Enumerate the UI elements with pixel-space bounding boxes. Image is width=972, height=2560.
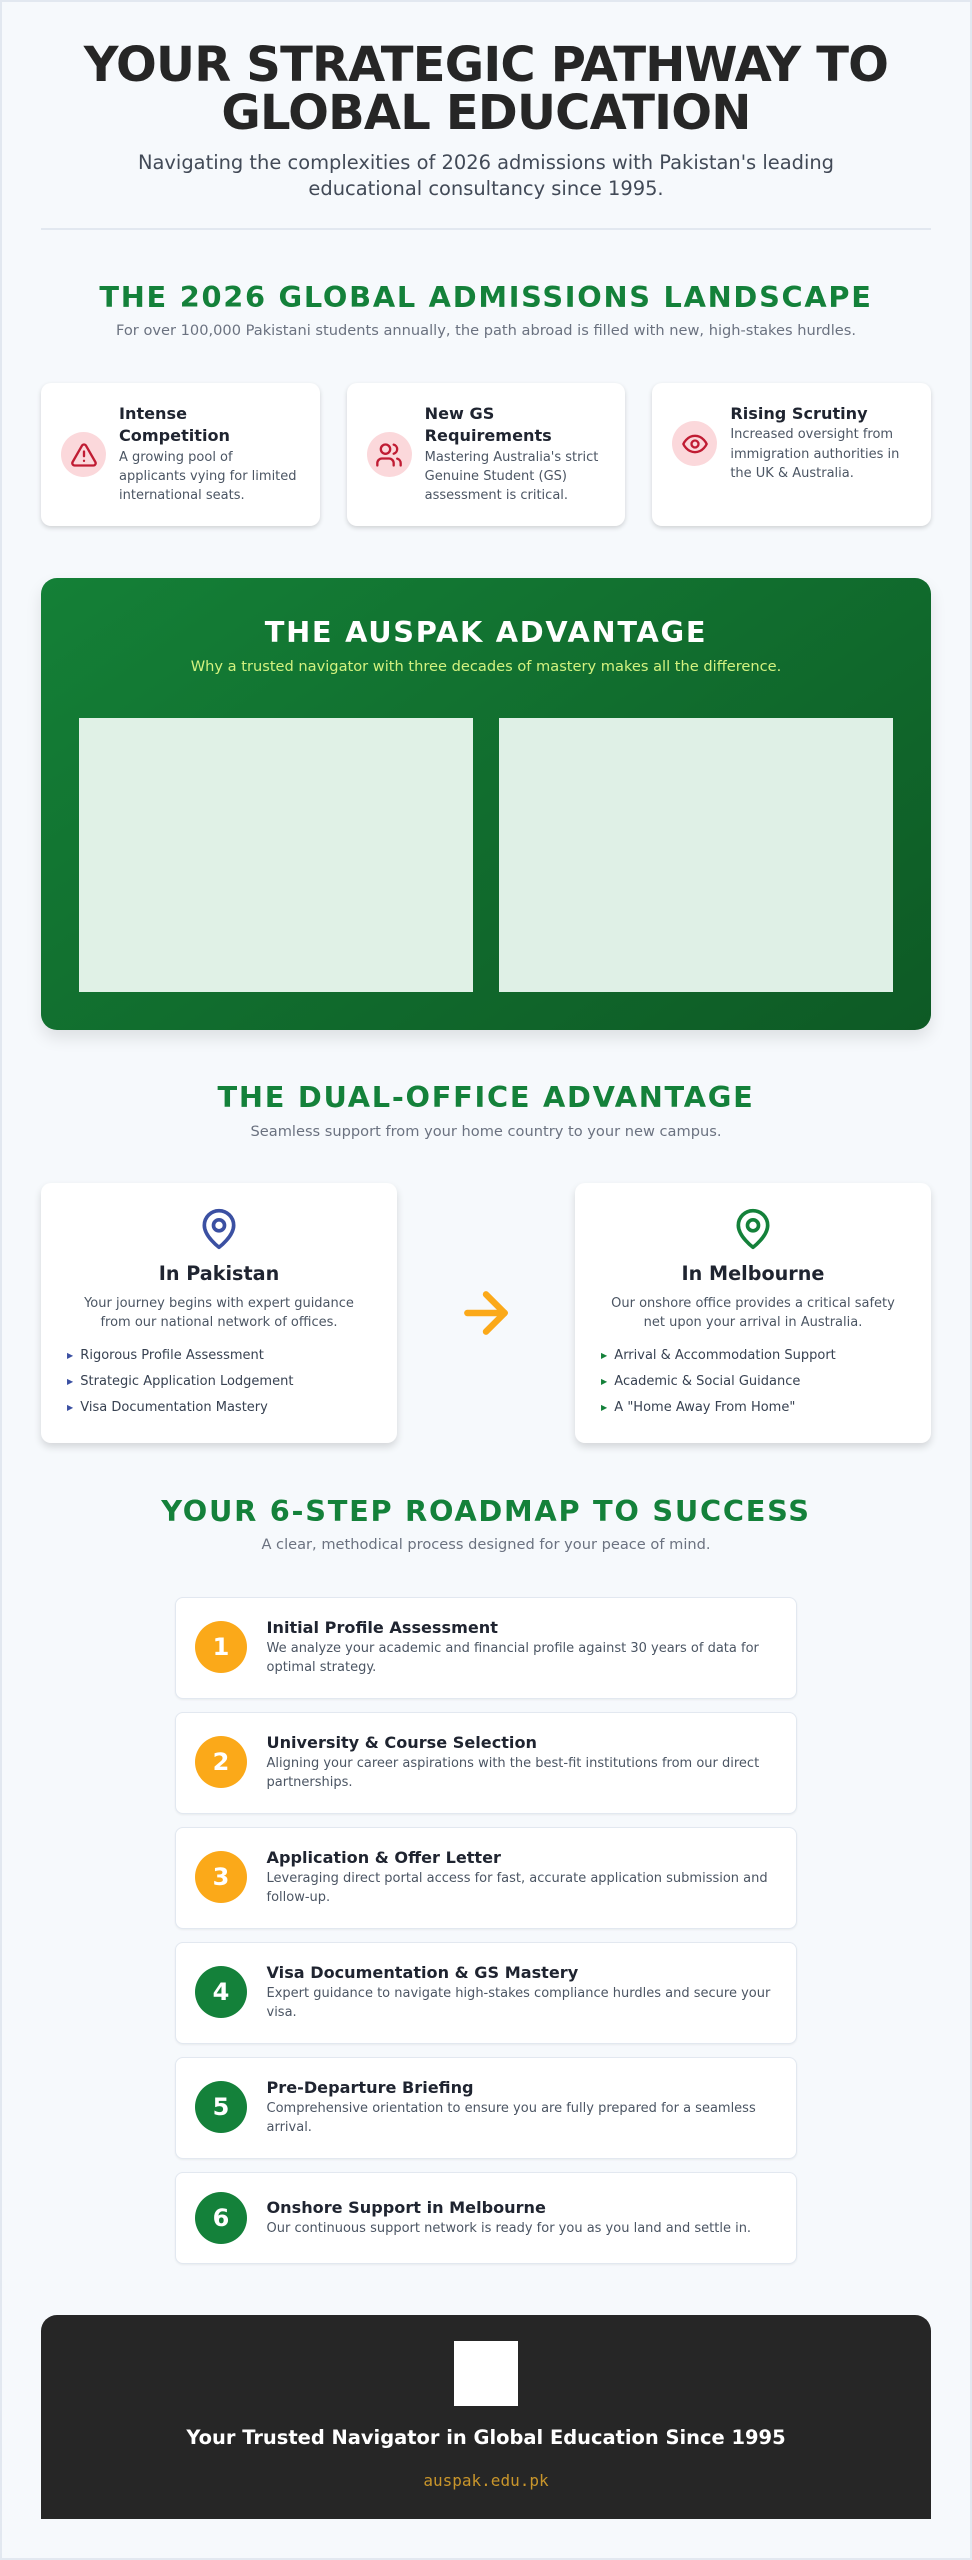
empty chart panel right [499, 718, 893, 992]
roadmap subheading: A clear, methodical process designed for your peace of mind. [261, 1536, 711, 1553]
title: GLOBAL EDUCATION [221, 84, 751, 140]
step 6 card: Onshore Support in Melbourne [266, 2198, 546, 2217]
icon: warning triangle [61, 432, 106, 477]
office services list: Academic & Social Guidance [614, 1374, 800, 1389]
step 2 card [175, 1712, 797, 1814]
office services list: ▶ [67, 1403, 73, 1412]
card text: assessment is critical. [425, 488, 568, 503]
icon: eye [672, 421, 717, 466]
title [83, 36, 888, 140]
card text: Competition [119, 426, 230, 445]
step 6 number [195, 2192, 247, 2244]
heading: dual office: THE DUAL-OFFICE ADVANTAGE [218, 1080, 754, 1114]
icon: users [367, 432, 412, 477]
step 4 card: Expert guidance to navigate high-stakes compliance hurdles and secure your [266, 1986, 770, 2001]
step 5 card: Comprehensive orientation to ensure you are fully prepared for a seamless [266, 2101, 756, 2116]
step 2 card: partnerships. [266, 1775, 353, 1790]
step 1 number [195, 1621, 247, 1673]
step 5 card: arrival. [266, 2120, 312, 2135]
panel: GS requirements [347, 383, 625, 526]
card text: Intense [119, 404, 187, 423]
heading: roadmap: YOUR 6-STEP ROADMAP TO SUCCESS [161, 1494, 811, 1528]
landscape subheading: For over 100,000 Pakistani students annually, the path abroad is filled with new, high-stakes hurdles. [116, 322, 856, 339]
step 5 number: 5 [213, 2093, 229, 2121]
step 6 card [175, 2172, 797, 2264]
step 6 number: 6 [213, 2204, 229, 2232]
card text [425, 404, 598, 503]
office services list [67, 1348, 294, 1415]
subtitle: educational consultancy since 1995. [308, 177, 664, 200]
card text [730, 404, 899, 481]
step 1 card: We analyze your academic and financial profile against 30 years of data for [266, 1641, 759, 1656]
panel: in pakistan [41, 1183, 397, 1443]
footer [41, 2315, 931, 2519]
office title: In Melbourne [682, 1262, 824, 1285]
office services list: Arrival & Accommodation Support [614, 1348, 836, 1363]
step 2 number [195, 1736, 247, 1788]
card text: Rising Scrutiny [730, 404, 868, 423]
card text: Mastering Australia's strict [425, 450, 598, 465]
icon: blue map pin [202, 1208, 236, 1250]
step 4 number [195, 1966, 247, 2018]
step 5 card [175, 2057, 797, 2159]
step 3 card: Application & Offer Letter [266, 1848, 501, 1867]
step 3 card: follow-up. [266, 1890, 330, 1905]
card text: applicants vying for limited [119, 469, 297, 484]
office description [611, 1296, 895, 1330]
advantage heading: THE AUSPAK ADVANTAGE [265, 615, 707, 649]
panel: in melbourne [575, 1183, 931, 1443]
step 3 number [195, 1851, 247, 1903]
logo placeholder [454, 2341, 518, 2406]
office description: Our onshore office provides a critical safety [611, 1296, 895, 1311]
office services list: ▶ [67, 1351, 73, 1360]
office title: In Pakistan [159, 1262, 279, 1285]
step 1 card: optimal strategy. [266, 1660, 376, 1675]
step 3 card: Leveraging direct portal access for fast, accurate application submission and [266, 1871, 768, 1886]
panel: rising scrutiny [652, 383, 931, 526]
step 2 number: 2 [213, 1748, 229, 1776]
step 1 card [175, 1597, 797, 1699]
card text: the UK & Australia. [730, 466, 854, 481]
card text [119, 404, 297, 503]
step 3 number: 3 [213, 1863, 229, 1891]
arrow: pakistan to melbourne [464, 1291, 508, 1335]
office services list: A "Home Away From Home" [614, 1400, 795, 1415]
office services list: Rigorous Profile Assessment [80, 1348, 264, 1363]
step 4 card [175, 1942, 797, 2044]
step 4 number: 4 [213, 1978, 229, 2006]
step 1 card: Initial Profile Assessment [266, 1618, 498, 1637]
panel: auspak advantage [41, 578, 931, 1030]
icon: green map pin [736, 1208, 770, 1250]
office description: Your journey begins with expert guidance [84, 1296, 354, 1311]
card text: Requirements [425, 426, 552, 445]
office services list: ▶ [601, 1377, 607, 1386]
advantage subheading: Why a trusted navigator with three decades of mastery makes all the difference. [191, 658, 781, 675]
card text: Increased oversight from [730, 427, 893, 442]
office description: net upon your arrival in Australia. [644, 1315, 862, 1330]
empty chart panel left [79, 718, 473, 992]
office services list: ▶ [601, 1403, 607, 1412]
panel: intense competition [41, 383, 320, 526]
card text: immigration authorities in [730, 447, 899, 462]
step 2 card: University & Course Selection [266, 1733, 537, 1752]
office services list [601, 1348, 836, 1415]
step 1 number: 1 [213, 1633, 229, 1661]
dual office subheading: Seamless support from your home country to your new campus. [251, 1123, 721, 1140]
office services list: ▶ [67, 1377, 73, 1386]
step 4 card: visa. [266, 2005, 297, 2020]
office services list: Strategic Application Lodgement [80, 1374, 293, 1389]
card text: New GS [425, 404, 494, 423]
subtitle: Navigating the complexities of 2026 admissions with Pakistan's leading [138, 151, 834, 174]
subtitle [138, 151, 834, 200]
step 5 card: Pre-Departure Briefing [266, 2078, 474, 2097]
card text: international seats. [119, 488, 245, 503]
step 5 number [195, 2081, 247, 2133]
title: YOUR STRATEGIC PATHWAY TO [84, 36, 888, 92]
step 3 card [175, 1827, 797, 1929]
card text: A growing pool of [119, 450, 233, 465]
office description [84, 1296, 354, 1330]
office services list: ▶ [601, 1351, 607, 1360]
card text: Genuine Student (GS) [425, 469, 567, 484]
footer tagline: Your Trusted Navigator in Global Education Since 1995 [186, 2426, 786, 2449]
step 4 card: Visa Documentation & GS Mastery [266, 1963, 578, 1982]
footer website: auspak.edu.pk [423, 2471, 549, 2490]
step 6 card: Our continuous support network is ready for you as you land and settle in. [266, 2221, 751, 2236]
office description: from our national network of offices. [100, 1315, 338, 1330]
heading: landscape: THE 2026 GLOBAL ADMISSIONS LANDSCAPE [99, 280, 873, 314]
step 2 card: Aligning your career aspirations with the best-fit institutions from our direct [266, 1756, 759, 1771]
office services list: Visa Documentation Mastery [80, 1400, 268, 1415]
